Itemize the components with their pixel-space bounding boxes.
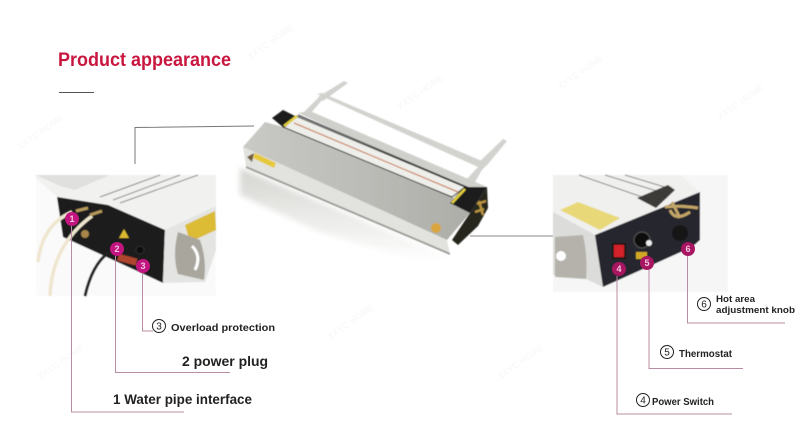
main top plate	[243, 122, 470, 240]
label: overload protection: 3	[156, 322, 162, 332]
metal bracket	[175, 232, 205, 280]
connector: machine to right detail	[470, 235, 553, 237]
grooves	[100, 175, 198, 203]
yellow label side	[253, 153, 276, 168]
brass knob	[431, 223, 441, 233]
badge 4	[612, 262, 626, 276]
background watermark	[15, 22, 765, 382]
reflection under machine	[240, 168, 452, 262]
badge 1: 1	[69, 214, 75, 224]
overload button	[136, 246, 144, 254]
hot area knob	[672, 225, 688, 241]
label: hot area knob	[698, 294, 795, 316]
label: power plug: 2 power plug	[182, 353, 268, 369]
brass connectors	[665, 202, 698, 218]
water pipes	[38, 212, 92, 296]
brass fitting	[81, 230, 89, 238]
adjustment frame	[304, 81, 507, 184]
silver top surface	[553, 175, 700, 235]
heating strip	[283, 116, 465, 197]
background watermark: XXYC HOME	[715, 82, 765, 122]
label: power switch	[636, 394, 714, 408]
label: hot area knob: Hot area	[716, 294, 756, 305]
yellow label	[185, 211, 216, 242]
black end panel	[595, 192, 700, 287]
metal bracket	[555, 235, 587, 279]
rear silver strip	[298, 111, 487, 193]
label: overload protection	[152, 320, 275, 334]
brass pipe fittings	[76, 208, 102, 215]
badge 3: 3	[140, 261, 146, 271]
badge 5	[640, 256, 654, 270]
thermostat dial	[634, 232, 650, 248]
black end cap left	[272, 110, 297, 128]
badge 3	[136, 259, 150, 273]
background watermark: XXYC HOME	[325, 302, 375, 342]
warning sign	[119, 229, 129, 238]
badge 5: 5	[644, 258, 650, 268]
brass connectors	[475, 201, 486, 215]
side silver	[553, 212, 603, 287]
number badges	[65, 212, 695, 276]
label: thermostat: Thermostat	[679, 349, 733, 360]
label: power switch: 4	[640, 396, 646, 406]
badge 2	[110, 242, 124, 256]
black end panel	[57, 197, 165, 283]
yellow label	[560, 202, 620, 230]
photo background	[36, 175, 216, 296]
central machine photo	[240, 81, 507, 262]
label: water pipe interface: 1 Water pipe interface	[113, 391, 252, 407]
background watermark: XXYC HOME	[495, 342, 545, 382]
title underline	[59, 92, 94, 93]
red power switch	[613, 244, 625, 258]
badge 6: 6	[685, 244, 691, 254]
background watermark: XXYC HOME	[15, 112, 65, 152]
label: power switch: Power Switch	[652, 397, 714, 408]
background watermark: XXYC HOME	[35, 342, 85, 382]
badge 6	[681, 242, 695, 256]
yellow sticker	[636, 252, 647, 259]
top cover plate	[637, 185, 675, 208]
orange heating wire	[294, 123, 458, 192]
connector: left detail to machine	[135, 126, 254, 164]
photo background	[553, 175, 728, 292]
leader lines	[72, 226, 785, 414]
silver top	[36, 175, 216, 230]
label: hot area knob: adjustment knob	[716, 305, 795, 316]
label: thermostat: 5	[664, 348, 670, 358]
black end cap right	[450, 187, 488, 245]
background watermark: XXYC HOME	[245, 22, 295, 62]
front side	[243, 147, 450, 255]
background watermark: XXYC HOME	[395, 72, 445, 112]
label: thermostat	[660, 346, 733, 360]
left detail photo	[36, 175, 216, 296]
side silver	[163, 206, 216, 283]
background watermark: XXYC HOME	[555, 52, 605, 92]
badge 4: 4	[616, 264, 622, 274]
right detail photo	[553, 175, 728, 292]
title: Product appearance	[58, 50, 231, 71]
badge 2: 2	[114, 244, 120, 254]
label: overload protection: Overload protection	[171, 322, 275, 334]
power cable	[85, 253, 108, 296]
badge 1	[65, 212, 79, 226]
frame corner	[36, 175, 110, 190]
label: hot area knob: 6	[701, 300, 707, 310]
red label	[117, 254, 137, 265]
